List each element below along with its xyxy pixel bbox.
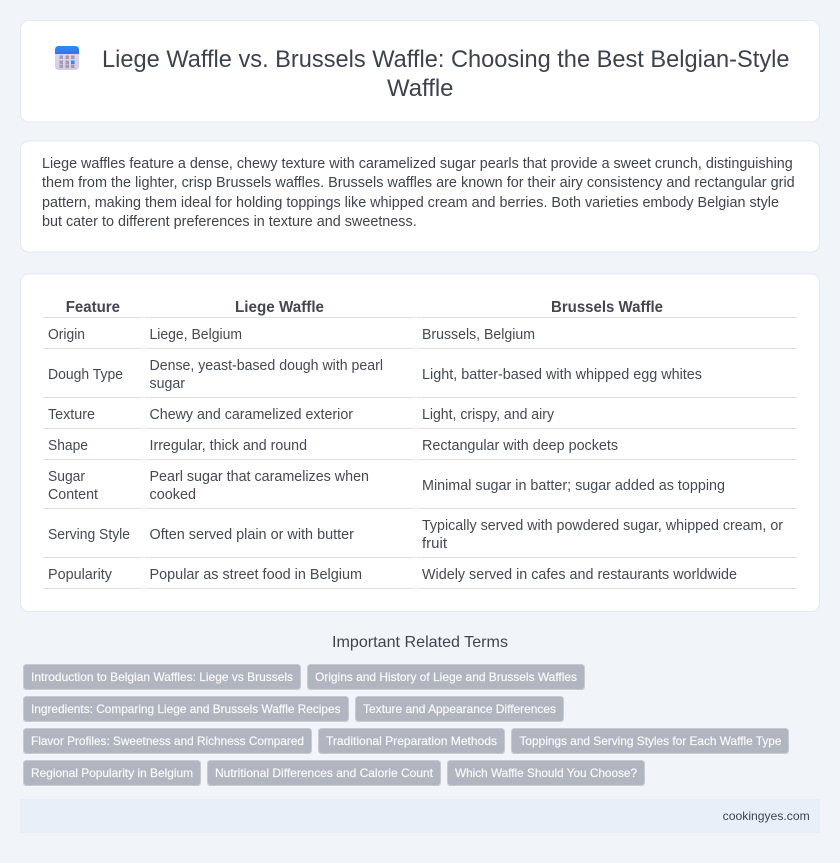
tag <box>208 760 440 786</box>
footer <box>20 799 820 833</box>
table row: dough type: Dense, yeast-based dough with pearl <box>150 358 383 374</box>
tag <box>24 728 312 754</box>
table row: shape: Shape <box>48 438 88 454</box>
table row: serving style <box>48 518 783 552</box>
text block: description: them from the lighter, crisp Brussels waffles. Brussels waffles are known for their airy consistency and rectangular grid <box>42 175 795 191</box>
table row: shape: Irregular, thick and round <box>150 438 307 454</box>
tag: Introduction to Belgian Waffles: Liege vs Brussels <box>31 670 293 684</box>
tag <box>448 760 644 786</box>
panel: related term tags <box>24 664 788 786</box>
table row: dough type: sugar <box>150 376 185 392</box>
table row: sugar content: Sugar <box>48 469 85 485</box>
text block: description: but cater to different preferences in texture and sweetness. <box>42 214 417 230</box>
table row: sugar content: Minimal sugar in batter; sugar added as topping <box>422 478 725 494</box>
tag: Ingredients: Comparing Liege and Brussels Waffle Recipes <box>31 702 340 716</box>
table row: sugar content: Pearl sugar that caramelizes when <box>150 469 369 485</box>
footer: cookingyes.com <box>723 809 810 823</box>
title: Liege Waffle vs. Brussels Waffle: Choosing the Best Belgian-Style <box>102 46 790 73</box>
table header row: Feature <box>66 299 120 316</box>
table row: dough type <box>48 358 702 392</box>
table row: origin <box>48 327 535 343</box>
table row: origin: Origin <box>48 327 85 343</box>
tag: Which Waffle Should You Choose? <box>455 766 637 780</box>
tag <box>308 664 584 690</box>
tag: Toppings and Serving Styles for Each Waffle Type <box>520 734 782 748</box>
tag: Regional Popularity in Belgium <box>31 766 193 780</box>
heading: important related terms: Important Related Terms <box>332 634 508 651</box>
tag: Nutritional Differences and Calorie Count <box>215 766 434 780</box>
tag <box>356 696 564 722</box>
table row: shape: Rectangular with deep pockets <box>422 438 618 454</box>
table row: texture: Light, crispy, and airy <box>422 407 555 423</box>
text block: description <box>42 156 795 230</box>
table row: serving style: Often served plain or with butter <box>150 527 354 543</box>
tag <box>24 696 348 722</box>
table row: serving style: fruit <box>422 536 447 552</box>
table row: serving style: Serving Style <box>48 527 130 543</box>
tag <box>512 728 788 754</box>
title <box>102 46 790 102</box>
table row: sugar content: Content <box>48 487 98 503</box>
tag: Flavor Profiles: Sweetness and Richness Compared <box>31 734 304 748</box>
table row: texture <box>48 407 555 423</box>
panel: description <box>20 141 820 252</box>
table header row <box>66 299 663 316</box>
table row: popularity: Popular as street food in Belgium <box>150 567 362 583</box>
table row: origin: Liege, Belgium <box>150 327 242 343</box>
tag <box>318 728 504 754</box>
icon: calendar <box>55 46 79 70</box>
text block: description: Liege waffles feature a dense, chewy texture with caramelized sugar pearls that provide a sweet crunch, distinguishing <box>42 156 793 172</box>
tag <box>24 664 300 690</box>
table row: popularity: Popularity <box>48 567 113 583</box>
table row: popularity: Widely served in cafes and restaurants worldwide <box>422 567 737 583</box>
tag <box>24 760 200 786</box>
table row: dough type: Light, batter-based with whipped egg whites <box>422 367 702 383</box>
table row: origin: Brussels, Belgium <box>422 327 535 343</box>
text block: description: pattern, making them ideal for holding toppings like whipped cream and berries. Both varieties embody Belgian style <box>42 195 779 211</box>
table row: dough type: Dough Type <box>48 367 123 383</box>
panel: header <box>20 20 820 122</box>
table row: serving style: Typically served with powdered sugar, whipped cream, or <box>422 518 783 534</box>
table header row: Brussels Waffle <box>551 299 663 316</box>
table row: texture: Texture <box>48 407 95 423</box>
table row: texture: Chewy and caramelized exterior <box>150 407 353 423</box>
table row: sugar content <box>48 469 725 503</box>
tag: Traditional Preparation Methods <box>326 734 497 748</box>
panel: comparison table <box>20 274 820 612</box>
title: Waffle <box>387 75 454 102</box>
table row: sugar content: cooked <box>150 487 196 503</box>
tag: Texture and Appearance Differences <box>363 702 556 716</box>
tag: Origins and History of Liege and Brussels Waffles <box>315 670 577 684</box>
table header row: Liege Waffle <box>235 299 324 316</box>
table row: shape <box>48 438 618 454</box>
table row: popularity <box>48 567 737 583</box>
